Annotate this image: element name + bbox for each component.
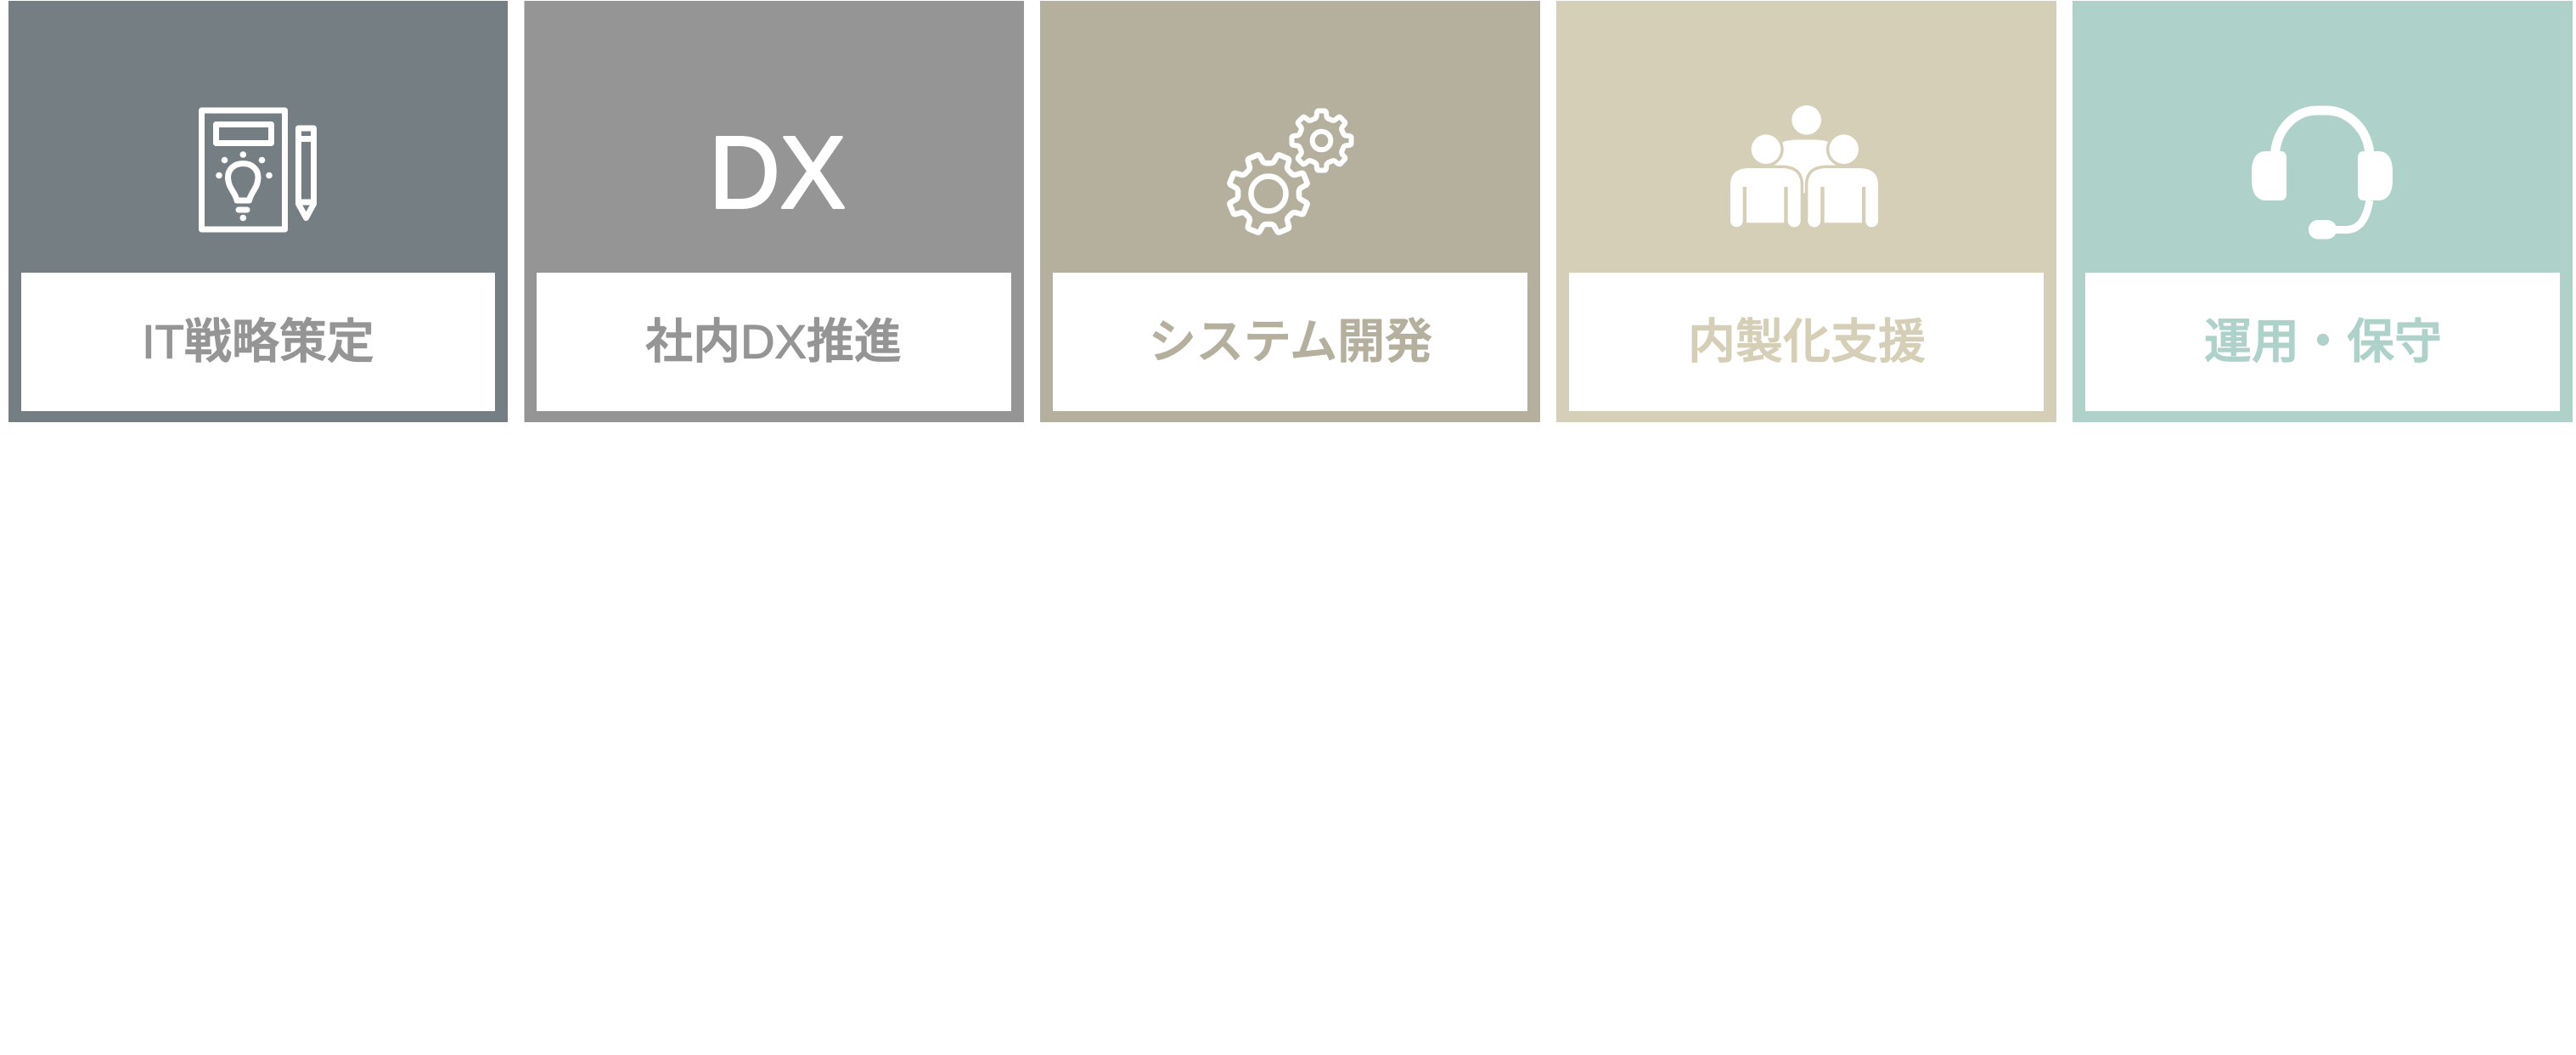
label: operations and maintenance: 運用・保守: [2204, 314, 2442, 369]
label: internal DX: 社内DX推進: [645, 314, 902, 369]
panel: internal DX: [525, 1, 1024, 422]
icon: two gears: [1227, 110, 1352, 235]
label: in-house support: 内製化支援: [1688, 314, 1926, 369]
icon: three people: [1730, 105, 1878, 228]
icon: DX lettering: DX: [709, 114, 846, 229]
icon: notepad with lightbulb and pencil: [202, 110, 314, 229]
panel: in-house support: [1556, 1, 2056, 422]
label: IT strategy: IT戦略策定: [142, 314, 374, 369]
label: system development: システム開発: [1149, 314, 1432, 369]
icon: headset: [2252, 110, 2393, 240]
panel: system development: [1040, 1, 1540, 422]
panel: operations and maintenance: [2073, 1, 2573, 422]
panel: IT strategy: [8, 1, 508, 422]
